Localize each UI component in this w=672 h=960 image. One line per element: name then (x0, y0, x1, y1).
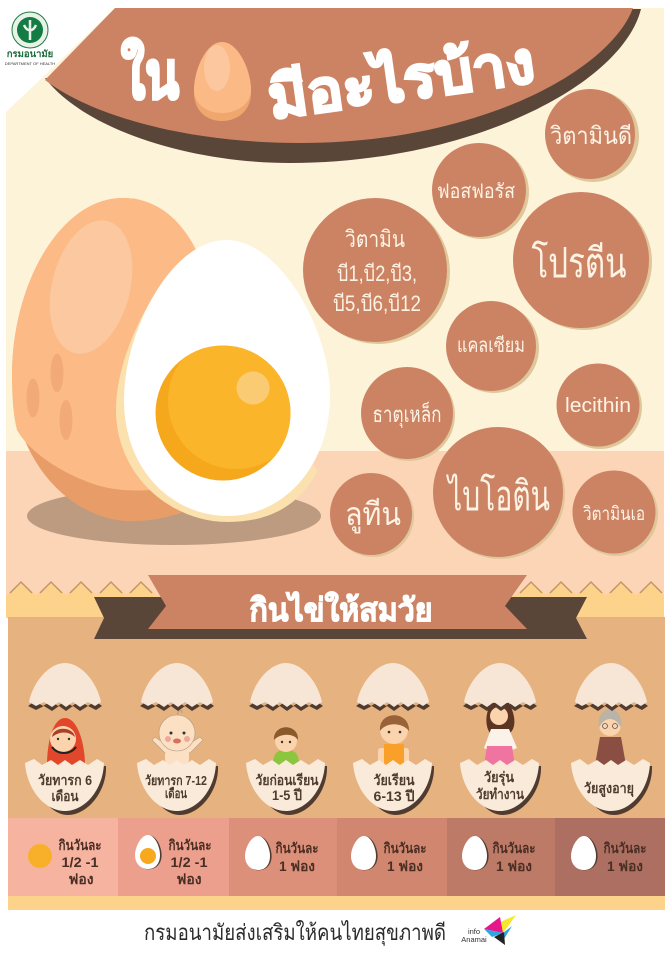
bubble: vitamin B: บี5,บี6,บี12 (333, 291, 421, 316)
bubble: lutein (330, 473, 414, 557)
age group 6: older adults (571, 663, 652, 815)
serving 2: กินวันละ (168, 837, 212, 853)
serving row (8, 818, 665, 896)
age group 5: teens and working age: วัยทำงาน (476, 786, 524, 802)
serving 5 (447, 818, 555, 896)
serving 5: 1 ฟอง (496, 858, 532, 874)
bubble: vitamin A: วิตามินเอ (583, 504, 645, 525)
serving 1: กินวันละ (58, 837, 102, 853)
age group 3: preschool: วัยก่อนเรียน (256, 772, 319, 788)
age group 3: preschool: 1-5 ปี (272, 787, 302, 803)
bubble: vitamin B: บี1,บี2,บี3, (337, 261, 417, 286)
age group 2: infant 7-12 months: วัยทารก 7-12 (145, 773, 207, 788)
character: baby (152, 711, 203, 767)
serving 5: กินวันละ (492, 840, 536, 856)
logo: info from Anamai (461, 915, 516, 945)
ribbon heading (94, 575, 587, 639)
bubble: phosphorus: ฟอสฟอรัส (437, 181, 515, 203)
serving 2: 1/2 -1 (170, 854, 208, 870)
bubble: lutein: ลูทีน (345, 496, 401, 534)
zigzag divider (10, 582, 662, 593)
ribbon heading: กินไข่ให้สมวัย (250, 591, 432, 628)
title banner (45, 8, 641, 163)
age group 4: school age: 6-13 ปี (374, 788, 415, 804)
serving 1: ฟอง (68, 871, 94, 887)
bubble: vitamin B: วิตามิน (345, 226, 405, 252)
character: school child (378, 715, 409, 765)
serving 3: 1 ฟอง (279, 858, 315, 874)
bubble: phosphorus (432, 143, 529, 239)
serving 2 (118, 818, 229, 896)
heading: title word 1: ใน (121, 36, 179, 112)
serving 2: ฟอง (176, 871, 202, 887)
bubble: biotin: ไบโอติน (446, 473, 550, 519)
bubble: lecithin: lecithin (565, 395, 631, 417)
age group 2: infant 7-12 months (137, 663, 218, 815)
serving 1: 1/2 -1 (62, 854, 99, 870)
character: baby in red hood (47, 718, 85, 765)
bubble: vitamin D (545, 89, 639, 182)
age group 4: school age (353, 663, 434, 815)
serving 4: กินวันละ (383, 840, 426, 856)
serving 6: 1 ฟอง (607, 858, 643, 874)
serving 4 (337, 818, 447, 896)
bubble: iron (361, 367, 455, 461)
bubble: vitamin A (572, 470, 658, 556)
illustration: whole and halved egg (12, 198, 330, 545)
serving 1 (8, 818, 118, 896)
serving 4: 1 ฟอง (387, 858, 423, 874)
logo: department of health: DEPARTMENT OF HEALTH (5, 61, 55, 66)
character: young woman (484, 703, 517, 765)
bubble: vitamin B (303, 198, 450, 344)
bubble: lecithin (556, 364, 642, 449)
character: elderly woman (595, 709, 626, 765)
age group 3: preschool (246, 663, 327, 815)
serving 3: กินวันละ (275, 840, 318, 856)
bubble: calcium: แคลเซียม (457, 335, 525, 357)
age group 4: school age: วัยเรียน (374, 772, 415, 788)
bubble: biotin (433, 427, 565, 559)
bubble: iron: ธาตุเหล็ก (372, 400, 442, 428)
serving 6 (555, 818, 665, 896)
age group 1: infant 6 months: วัยทารก 6 (38, 772, 92, 788)
age group 5: teens and working age: วัยรุ่น (484, 769, 514, 786)
age group 1: infant 6 months (25, 663, 106, 815)
age group 5: teens and working age (460, 663, 541, 815)
logo: department of health (5, 12, 55, 66)
bubble: vitamin D: วิตามินดี (550, 123, 632, 150)
logo: department of health: กรมอนามัย (7, 49, 53, 60)
serving 3 (229, 818, 337, 896)
logo: info from Anamai: Anamai (461, 935, 487, 944)
bubble: calcium (446, 301, 539, 393)
age group 6: older adults: วัยสูงอายุ (584, 780, 634, 797)
age group 2: infant 7-12 months: เดือน (165, 786, 187, 801)
heading: title rest: มีอะไรบ้าง (264, 29, 539, 132)
footer slogan: กรมอนามัยส่งเสริมให้คนไทยสุขภาพดี (144, 920, 446, 946)
character: preschool boy (273, 727, 299, 765)
bubble: protein: โปรตีน (532, 240, 626, 286)
icon: title egg (194, 42, 251, 121)
nutrient bubbles (303, 89, 658, 559)
logo: info from Anamai: info (468, 927, 480, 936)
serving 6: กินวันละ (603, 840, 646, 856)
bubble: protein (513, 192, 652, 330)
age group 1: infant 6 months: เดือน (52, 788, 79, 804)
